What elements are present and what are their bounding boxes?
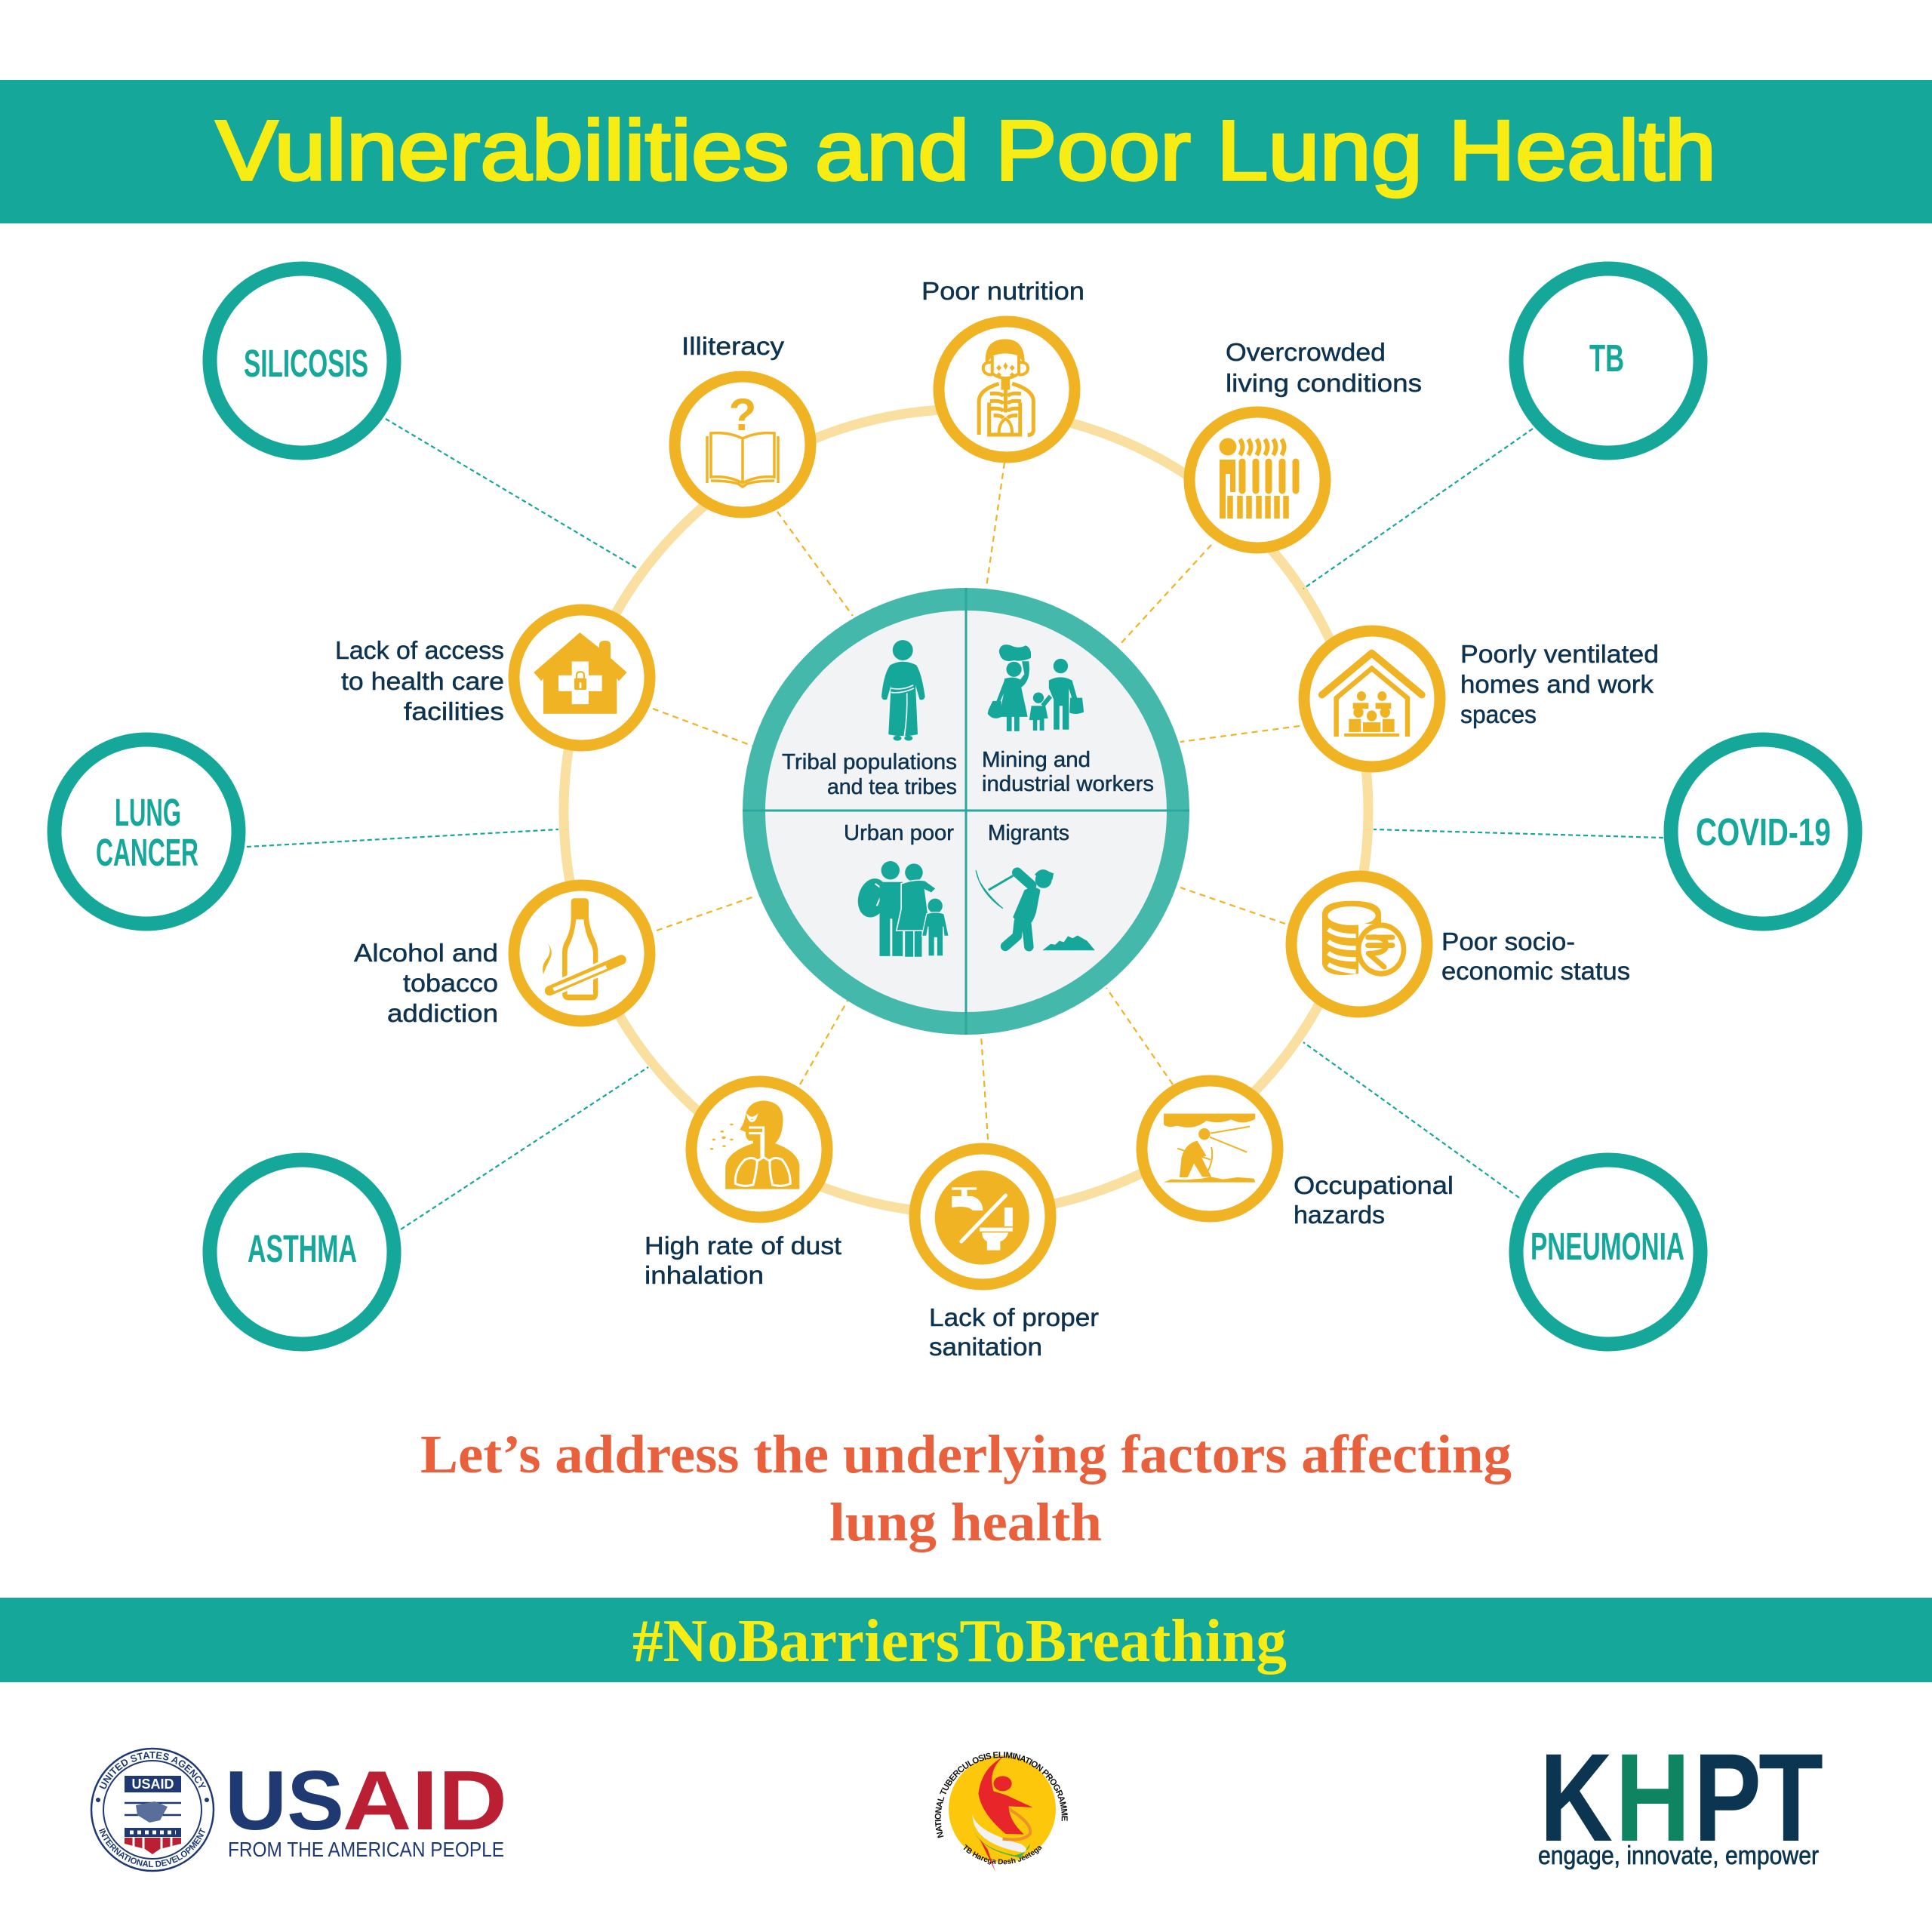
risk factor: overcrowded living conditions: Overcrowded	[1226, 338, 1386, 366]
population labels: Mining and	[982, 748, 1091, 772]
dashed connectors: ring to diseases	[247, 419, 1663, 1229]
USAID seal: USAID	[131, 1777, 174, 1792]
risk factor: high rate of dust inhalation: High rate of dust	[645, 1232, 841, 1260]
risk factor: lack of proper sanitation: sanitation	[929, 1333, 1042, 1361]
disease: covid-19: COVID-19	[1696, 811, 1831, 854]
panel: vulnerable populations centre circle	[743, 588, 1189, 1035]
icon: open book with question mark	[707, 389, 778, 487]
risk factor: poorly ventilated homes: homes and work	[1460, 670, 1654, 698]
NTEP figure	[972, 1757, 1033, 1872]
risk factor: high rate of dust inhalation: inhalation	[645, 1261, 764, 1289]
risk factor: alcohol and tobacco addiction: Alcohol and	[354, 939, 498, 967]
risk factor: poor socio-economic status: economic status	[1441, 957, 1630, 985]
risk factor: alcohol and tobacco addiction	[354, 885, 650, 1027]
title banner	[0, 80, 1932, 223]
logo: KHPT: K	[1540, 1728, 1613, 1868]
risk factor: occupational hazards	[1142, 1081, 1454, 1229]
icon: malnourished figure	[979, 339, 1033, 435]
population labels: Tribal populations	[782, 750, 957, 774]
disease: silicosis: SILICOSIS	[244, 342, 368, 385]
hashtag banner: #NoBarriersToBreathing	[632, 1608, 1287, 1675]
icon: open book with question mark: ?	[729, 389, 756, 440]
hashtag banner	[0, 1598, 1932, 1682]
icon: migrant worker with pickaxe	[976, 869, 1095, 950]
icon: bottle and cigarette	[543, 898, 621, 1000]
icon: tap and toilet crossed out	[935, 1171, 1029, 1265]
call to action: lung health	[829, 1492, 1102, 1552]
logo: KHPT: T	[1758, 1728, 1823, 1868]
icon: mining and industrial family	[988, 645, 1084, 731]
population labels: and tea tribes	[827, 775, 957, 799]
risk factor: illiteracy	[675, 332, 811, 512]
logo: national TB elimination programme: TB Harega Desh Jeetega	[963, 1844, 1043, 1864]
risk factor: lack of proper sanitation: Lack of proper	[929, 1303, 1099, 1331]
risk factor: high rate of dust inhalation	[645, 1081, 841, 1289]
population labels: industrial workers	[982, 772, 1154, 796]
call to action: Let’s address the underlying factors affecting	[420, 1424, 1512, 1484]
population icons	[854, 640, 1095, 957]
risk factor: poor nutrition: Poor nutrition	[921, 277, 1084, 305]
USAID seal: INTERNATIONAL DEVELOPMENT	[99, 1828, 205, 1867]
USAID seal	[91, 1748, 214, 1872]
logo: national TB elimination programme: NATIONAL TUBERCULOSIS ELIMINATION PROGRAMME	[934, 1752, 1068, 1838]
icon: house with locked cross	[534, 632, 627, 714]
icon: house with people	[1322, 653, 1422, 737]
USAID wordmark	[225, 1754, 507, 1847]
disease: pneumonia	[1516, 1160, 1700, 1344]
risk factor: illiteracy: Illiteracy	[681, 332, 785, 360]
icon: miner in tunnel	[1164, 1114, 1255, 1183]
risk factor: poorly ventilated homes: Poorly ventilated	[1460, 640, 1659, 668]
risk factor: poorly ventilated homes	[1304, 631, 1659, 767]
USAID wordmark: US	[225, 1754, 344, 1847]
disease: TB: TB	[1589, 337, 1624, 380]
risk factor: alcohol and tobacco addiction: addiction	[387, 999, 498, 1027]
logo: KHPT: H	[1615, 1728, 1690, 1868]
risk factor: lack of access to health care: to health care	[341, 667, 504, 695]
population labels: Urban poor	[844, 821, 954, 845]
dashed connectors: centre to risk factors	[653, 463, 1300, 1140]
large ring connecting risk factors	[564, 409, 1368, 1214]
icon: coin stack with rupee	[1322, 901, 1406, 977]
population labels	[782, 748, 1154, 845]
risk factor: occupational hazards: Occupational	[1294, 1171, 1454, 1199]
disease: lung cancer: CANCER	[96, 831, 198, 874]
disease: covid-19	[1671, 740, 1855, 924]
disease: TB	[1516, 269, 1700, 453]
risk factor: overcrowded living conditions	[1189, 338, 1422, 548]
icon: crowd of people	[1220, 438, 1296, 518]
USAID wordmark: AID	[343, 1754, 507, 1847]
risk factor: lack of access to health care: Lack of access	[335, 636, 504, 664]
logo: USAID: FROM THE AMERICAN PEOPLE	[228, 1838, 504, 1861]
risk factor: poor nutrition	[921, 277, 1084, 457]
title: Vulnerabilities and Poor Lung Health	[216, 103, 1716, 198]
disease: asthma: ASTHMA	[248, 1227, 357, 1270]
risk factor: occupational hazards: hazards	[1294, 1201, 1385, 1229]
risk factor: alcohol and tobacco addiction: tobacco	[403, 969, 498, 997]
icon: urban poor family	[854, 861, 949, 957]
logo: KHPT: engage, innovate, empower	[1538, 1841, 1819, 1870]
disease: lung cancer: LUNG	[115, 791, 181, 834]
risk factor: poor socio-economic status	[1291, 876, 1630, 1012]
icon: dust and lungs	[710, 1100, 799, 1189]
USAID seal: UNITED STATES AGENCY	[99, 1752, 206, 1789]
icon: tribal woman	[881, 640, 925, 740]
risk factor: lack of proper sanitation	[915, 1149, 1099, 1361]
call to action	[420, 1424, 1512, 1552]
risk factor: overcrowded living conditions: living conditions	[1226, 369, 1422, 397]
logo: USAID	[91, 1748, 507, 1872]
risk factor: lack of access to health care: facilities	[404, 697, 504, 725]
risk factor: poor socio-economic status: Poor socio-	[1441, 928, 1575, 955]
disease: lung cancer	[54, 740, 238, 924]
risk factor: lack of access to health care	[335, 610, 650, 746]
disease: silicosis	[210, 269, 394, 453]
risk factor: poorly ventilated homes: spaces	[1460, 700, 1537, 728]
logo: KHPT	[1538, 1728, 1823, 1870]
logo: KHPT: P	[1694, 1728, 1761, 1868]
population labels: Migrants	[988, 821, 1069, 845]
disease: pneumonia: PNEUMONIA	[1531, 1225, 1684, 1268]
disease: asthma	[210, 1160, 394, 1344]
